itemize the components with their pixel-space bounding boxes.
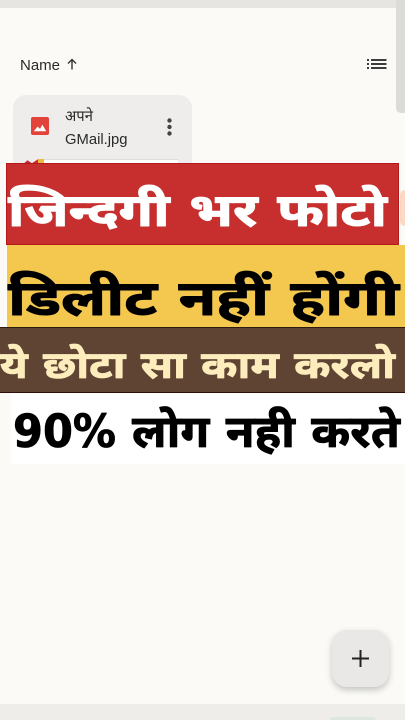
banner: yellow [7,245,405,327]
headline line 4 [13,405,402,458]
peach blur at right [400,190,405,226]
bottom navigation bar [0,704,405,720]
headline line 3: ये छोटा सा काम करलो [0,343,396,387]
headline line 1: जिन्दगी भर फोटो [8,183,389,237]
banner: brown [0,327,405,393]
banner: white [11,393,405,464]
icon: list view [367,59,386,69]
icon: up arrow [68,58,76,70]
button: add [332,630,389,687]
banner: red [6,163,399,245]
thumbnail fragment [24,159,44,163]
headline line 4: 90% [13,405,116,458]
headline line 4: लोग नही करते [132,405,401,458]
file name: अपने [65,109,93,125]
file name: GMail.jpg [65,132,128,148]
icon: image file [31,117,49,135]
icon: plus [352,650,369,667]
sort header: Name: Name [20,57,60,74]
icon: more menu [167,118,172,136]
nav indicator [330,717,376,720]
file name [65,107,128,148]
top status bar strip [0,0,405,8]
thumbnail edge [43,159,178,171]
panel: file card [13,95,192,170]
scrollbar [396,0,405,113]
headline line 2: डिलीट नहीं होंगी [8,270,401,327]
